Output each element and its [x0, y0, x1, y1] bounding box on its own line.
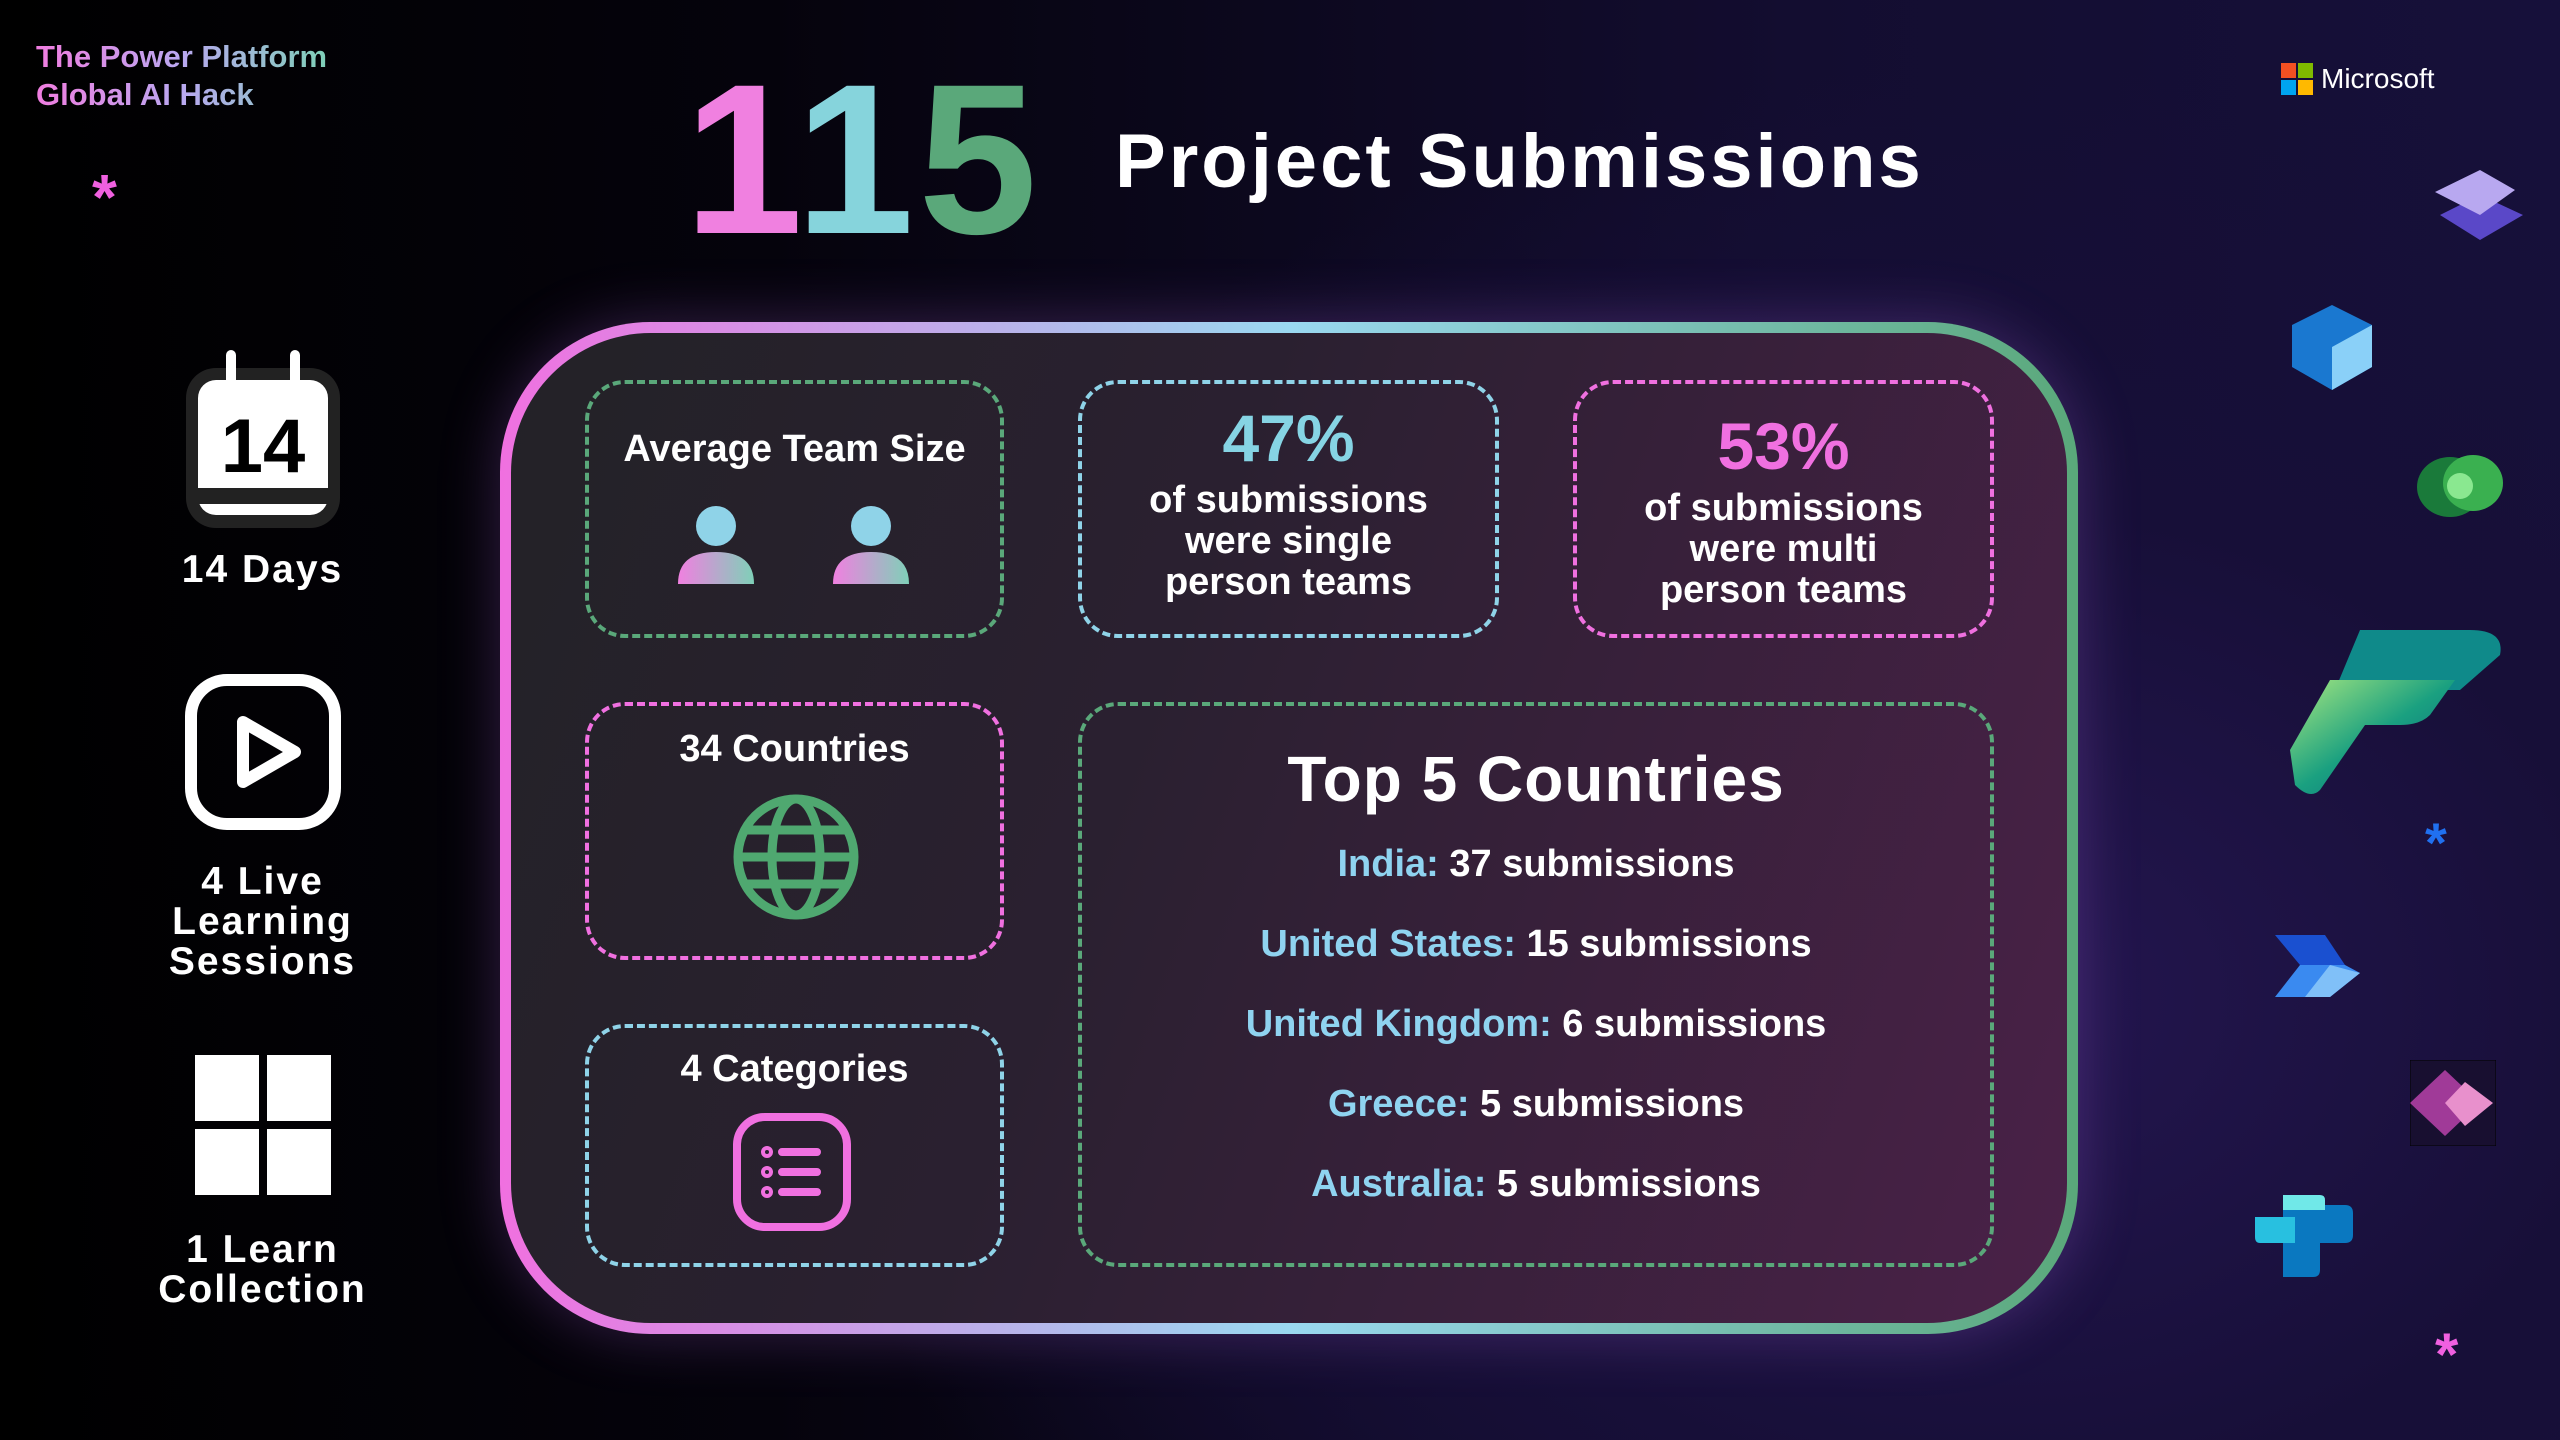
- left stat: learn collection: Collection: [158, 1268, 367, 1311]
- icon: people: [678, 506, 909, 584]
- card: 4 categories: 4 Categories: [680, 1048, 909, 1090]
- card: 47%: person teams: [1165, 561, 1412, 603]
- country list: United States: 15 submissions: [1260, 923, 1812, 965]
- country list: India: 37 submissions: [1338, 843, 1734, 885]
- icon: calendar: [186, 350, 340, 528]
- card: 34 countries: 34 Countries: [679, 728, 910, 770]
- pink asterisk: *: [92, 161, 117, 233]
- card: 53%: [1573, 380, 1994, 638]
- icon: automate arrow: [2275, 935, 2360, 997]
- left stat: 14 days: 14 Days: [182, 548, 343, 591]
- left stat: learn collection: [158, 1055, 367, 1311]
- icon: windows: [195, 1055, 331, 1195]
- left stat: learn collection: 1 Learn: [186, 1228, 339, 1271]
- pink asterisk: *: [2435, 1321, 2458, 1388]
- card: 47%: were single: [1185, 520, 1392, 562]
- card: 34 countries: [585, 702, 1004, 960]
- headline number: 115: [684, 40, 1041, 279]
- card: 53%: person teams: [1660, 569, 1907, 611]
- card: 47%: of submissions: [1149, 479, 1428, 521]
- brand title: Global AI Hack: [36, 77, 254, 112]
- icon: list: [733, 1113, 851, 1231]
- country list: United Kingdom: 6 submissions: [1246, 1003, 1826, 1045]
- card: average team size: [585, 380, 1004, 638]
- icon: globe: [734, 794, 858, 920]
- card: 53%: were multi: [1690, 528, 1877, 570]
- country list: [1246, 843, 1826, 1205]
- brand title: [36, 38, 327, 114]
- icon: layers purple: [2435, 170, 2523, 240]
- blue asterisk: *: [2425, 811, 2447, 874]
- icon: copilot studio: [2255, 1195, 2353, 1277]
- icon: power pages: [2290, 630, 2501, 794]
- left stat: live sessions: [169, 674, 356, 983]
- left stat: 14 days: [182, 350, 343, 591]
- microsoft logo: Microsoft: [2321, 63, 2435, 94]
- left stat: live sessions: 4 Live: [201, 860, 324, 903]
- brand title: The Power Platform: [36, 39, 327, 74]
- card: top 5 countries: [1078, 702, 1994, 1267]
- icon: play: [185, 674, 341, 830]
- country list: Australia: 5 submissions: [1311, 1163, 1761, 1205]
- card: 47%: 47%: [1222, 401, 1355, 475]
- card: average team size: Average Team Size: [623, 428, 966, 470]
- main panel: [500, 322, 2078, 1334]
- left stat: live sessions: Learning: [172, 900, 353, 943]
- card: 53%: 53%: [1717, 409, 1850, 483]
- card: 47%: [1078, 380, 1499, 638]
- card: top 5 countries: Top 5 Countries: [1287, 743, 1785, 815]
- card: 4 categories: [585, 1024, 1004, 1267]
- icon: apps diamond: [2410, 1060, 2496, 1146]
- country list: Greece: 5 submissions: [1328, 1083, 1744, 1125]
- card: 53%: of submissions: [1644, 487, 1923, 529]
- right icon column: [2255, 170, 2523, 1388]
- icon: green ring: [2417, 455, 2503, 517]
- left stat: live sessions: Sessions: [169, 940, 356, 983]
- icon: blue hex: [2292, 305, 2372, 390]
- headline text: Project Submissions: [1115, 119, 1924, 204]
- icon: calendar: 14: [220, 404, 305, 489]
